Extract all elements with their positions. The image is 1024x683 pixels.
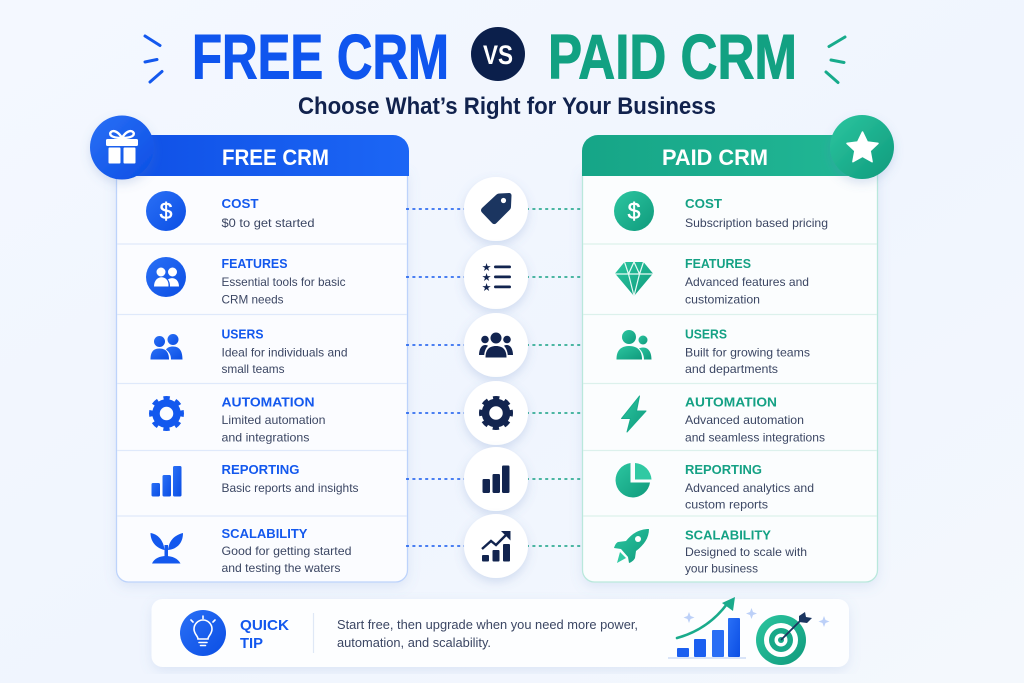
panel: paid crm — [582, 115, 894, 582]
panel header: FREE CRM — [222, 145, 329, 170]
description: small teams — [222, 362, 284, 376]
label: AUTOMATION — [222, 394, 314, 410]
row: reporting — [152, 462, 358, 496]
description: Limited automation — [222, 413, 326, 427]
sparks: right — [826, 37, 845, 82]
quick tip label: QUICK — [240, 617, 289, 634]
label: USERS — [222, 326, 264, 342]
label: COST — [222, 196, 259, 211]
description: customization — [685, 292, 760, 306]
row: scalability — [150, 526, 352, 575]
icon: diamond — [615, 262, 653, 296]
illustration: target with dart — [756, 612, 812, 665]
sparks: left — [145, 36, 162, 82]
description: CRM needs — [222, 292, 284, 306]
icon: sprout — [150, 533, 183, 564]
icon: users — [150, 334, 182, 360]
description: Designed to scale with — [685, 545, 807, 559]
icon: gear — [464, 381, 528, 445]
description: Basic reports and insights — [222, 481, 358, 495]
description: Good for getting started — [222, 544, 352, 558]
label: FEATURES — [222, 256, 288, 271]
icon: price tag — [464, 177, 528, 241]
row: users — [150, 326, 348, 376]
icon: bars — [464, 447, 528, 511]
center column icons — [464, 177, 528, 578]
description: Essential tools for basic — [222, 275, 346, 289]
description: Advanced features and — [685, 275, 809, 289]
icon: star list: ★ — [482, 281, 492, 294]
panel: quick tip — [152, 597, 849, 667]
label: SCALABILITY — [222, 526, 308, 541]
description: and integrations — [222, 430, 310, 444]
description: Built for growing teams — [685, 346, 810, 360]
icon: dollar: $ — [628, 198, 641, 224]
icon: people circle — [146, 257, 186, 297]
connectors — [406, 209, 583, 546]
icon: users — [616, 330, 652, 360]
icon: dollar — [146, 191, 186, 231]
label: AUTOMATION — [685, 394, 777, 410]
icon: bars — [152, 466, 182, 496]
description: and seamless integrations — [685, 430, 825, 444]
row: features — [146, 256, 346, 306]
label: REPORTING — [685, 462, 762, 477]
row: cost — [146, 191, 314, 231]
heading: paid crm: PAID CRM — [548, 22, 797, 92]
label: USERS — [685, 326, 727, 342]
label: SCALABILITY — [685, 528, 771, 542]
illustration: growth bars and arrow — [668, 597, 830, 658]
heading: free crm: FREE CRM — [192, 22, 449, 92]
row: cost — [614, 191, 828, 231]
title — [145, 22, 845, 120]
vs badge — [471, 27, 525, 81]
row: automation — [149, 394, 326, 444]
panel header: PAID CRM — [662, 145, 768, 170]
label: COST — [685, 196, 722, 211]
row: scalability — [614, 528, 807, 576]
description: Advanced analytics and — [685, 481, 814, 495]
icon: pie chart — [616, 463, 652, 497]
panel: free crm — [90, 116, 409, 582]
description: Advanced automation — [685, 413, 804, 427]
icon: gear — [149, 396, 184, 431]
panel body — [582, 170, 878, 582]
description: $0 to get started — [222, 216, 314, 230]
icon: dollar — [614, 191, 654, 231]
subtitle: Choose What’s Right for Your Business — [298, 93, 716, 120]
quick tip text: Start free, then upgrade when you need more power, — [337, 617, 638, 632]
description: Subscription based pricing — [685, 216, 828, 230]
icon: star list: ★ — [482, 261, 492, 274]
panel header — [116, 135, 409, 176]
row: reporting — [616, 462, 814, 512]
description: your business — [685, 562, 758, 576]
icon: lightning — [622, 396, 646, 432]
quick tip text: automation, and scalability. — [337, 635, 491, 650]
row: users — [616, 326, 810, 376]
icon: rocket — [614, 529, 649, 563]
icon: star list — [464, 245, 528, 309]
icon: team — [464, 313, 528, 377]
icon: light bulb — [180, 610, 226, 656]
icon: star list: ★ — [482, 271, 492, 284]
label: REPORTING — [222, 462, 300, 477]
icon: dollar: $ — [160, 198, 173, 224]
icon: gift badge — [90, 116, 154, 180]
quick tip label: TIP — [240, 635, 263, 652]
icon: star badge — [830, 115, 894, 179]
icon: growth chart — [464, 514, 528, 578]
label: FEATURES — [685, 256, 751, 271]
row: features — [615, 256, 809, 306]
description: custom reports — [685, 498, 768, 512]
description: and departments — [685, 362, 778, 376]
panel body — [116, 170, 408, 582]
description: and testing the waters — [222, 561, 340, 575]
description: Ideal for individuals and — [222, 346, 348, 360]
vs badge: VS — [483, 40, 513, 70]
panel header — [582, 135, 860, 176]
row: automation — [622, 394, 825, 444]
